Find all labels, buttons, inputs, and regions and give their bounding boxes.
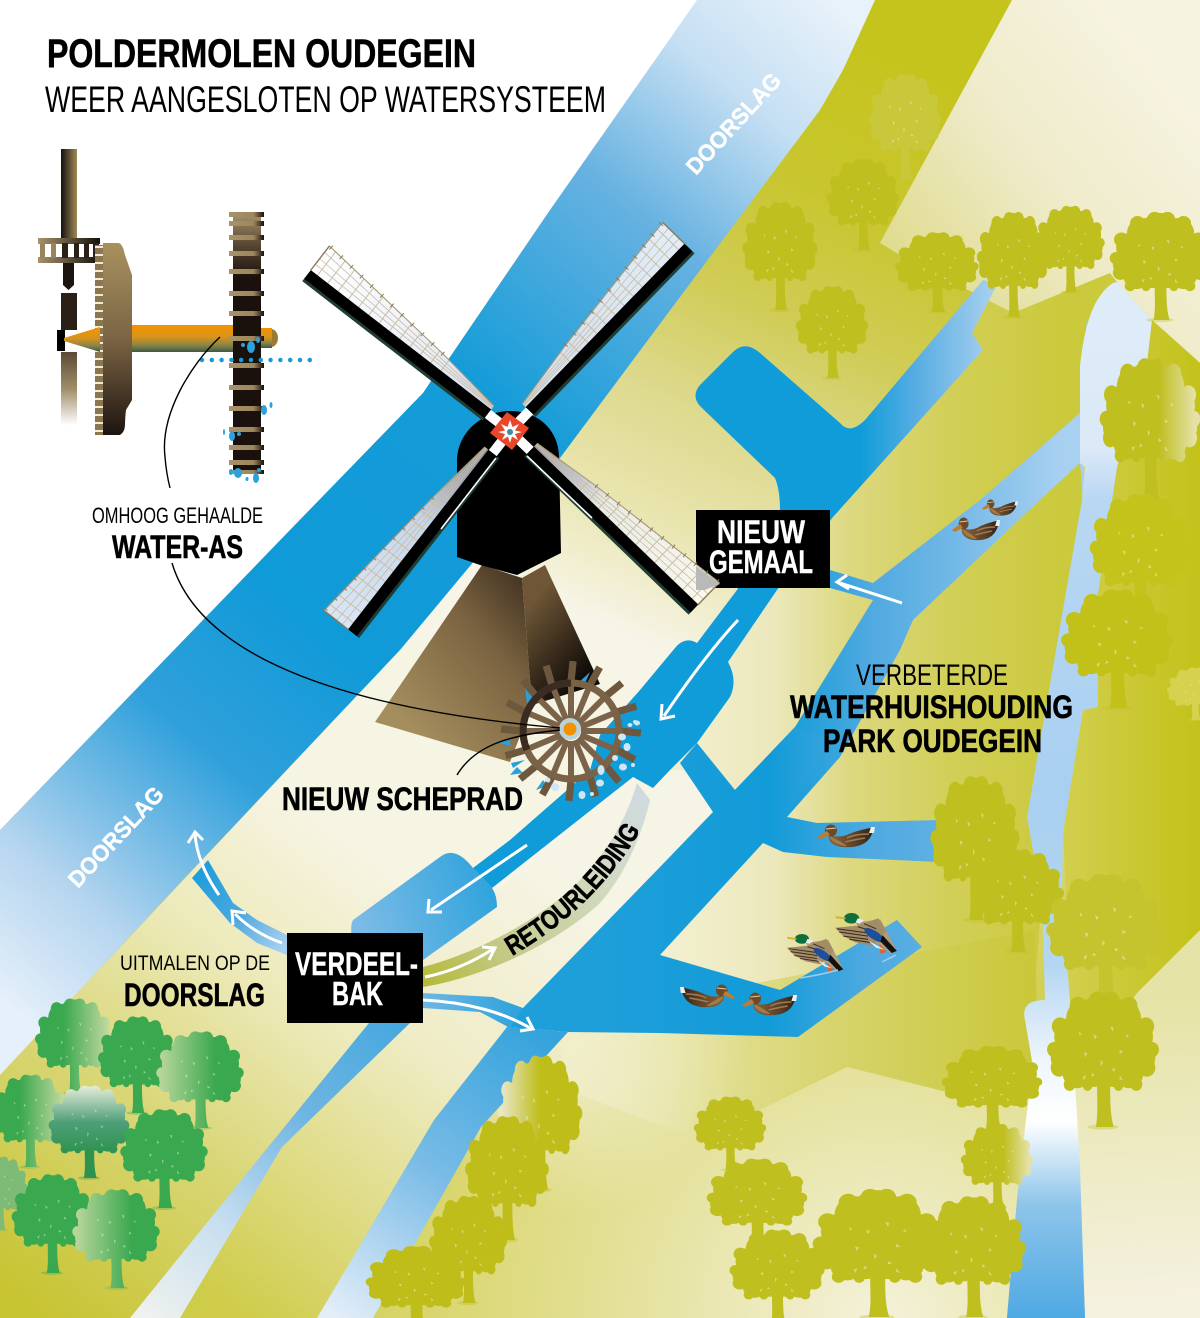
label: uitmalen op de doorslag: DOORSLAG [124,977,265,1013]
label: uitmalen op de doorslag: UITMALEN OP DE [120,952,270,975]
windmill [302,222,720,638]
label: verbeterde waterhuishouding: PARK OUDEGEIN [823,723,1042,759]
label: doorslag top: DOORSLAG [681,67,786,179]
scoop wheel [495,661,641,801]
label: verbeterde waterhuishouding: VERBETERDE [856,659,1008,692]
retourleiding pipe [423,783,650,987]
label box: Verdeelbak: VERDEEL- [295,946,418,982]
label box: Verdeelbak [287,933,423,1023]
inset: mechanism [38,149,316,483]
label: uitmalen op de doorslag [120,952,270,1013]
label box: Nieuw Gemaal: NIEUW [717,514,806,550]
title [45,32,606,120]
label box: Verdeelbak: BAK [332,975,383,1012]
label: water-as [92,503,263,565]
trees: park olive [694,74,1200,1318]
label box: Nieuw Gemaal: GEMAAL [709,544,813,580]
ducks swimming [680,499,1018,1015]
label box: Nieuw Gemaal [696,510,830,588]
river [1007,282,1152,1318]
title: POLDERMOLEN OUDEGEIN [47,32,476,76]
label: nieuw scheprad: NIEUW SCHEPRAD [282,781,523,817]
water network [130,280,1087,1318]
mill shadow [375,565,600,762]
canal: Doorslag [0,0,875,1075]
label: water-as: WATER-AS [112,529,243,565]
leader line: water-as [164,337,560,728]
label: verbeterde waterhuishouding [790,659,1073,759]
trees: green grove [0,998,244,1290]
label: verbeterde waterhuishouding: WATERHUISHOUDING [790,689,1073,725]
title: WEER AANGESLOTEN OP WATERSYSTEEM [45,79,606,120]
leader line: scheprad [457,730,560,775]
label: water-as: OMHOOG GEHAALDE [92,503,263,528]
water flow arrows [188,575,902,1031]
trees: canal row [366,1056,582,1318]
ducks landing [787,913,897,978]
label: doorslag bottom: DOORSLAG [63,781,169,892]
label: retourleiding: RETOURLEIDING [504,824,638,956]
